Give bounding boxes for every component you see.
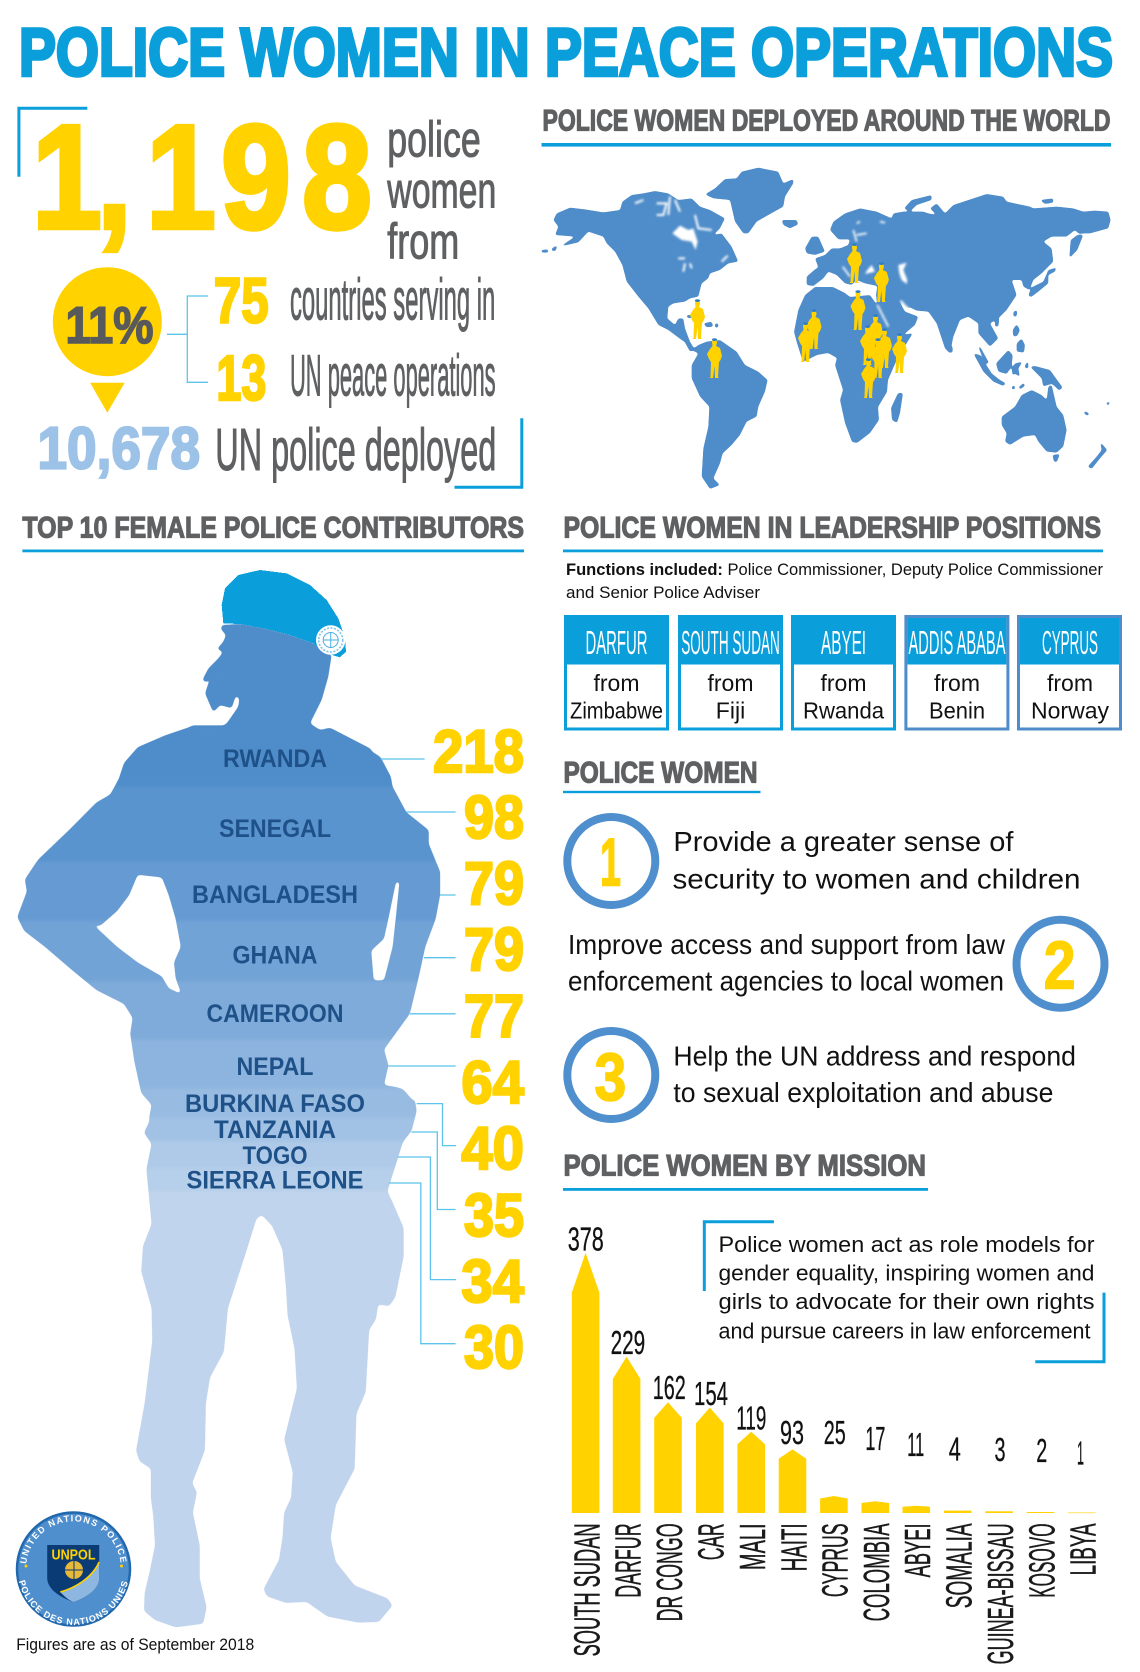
bar chart: 1 xyxy=(1077,1435,1084,1472)
item 3 xyxy=(567,1031,1076,1119)
panel: leadership positions xyxy=(563,512,1120,729)
mission labels xyxy=(566,1523,1104,1664)
badge: 11 percent: 11% xyxy=(66,297,154,355)
country labels: TOGO xyxy=(242,1142,308,1170)
card: Abyei: Rwanda xyxy=(803,697,884,723)
card: Cyprus: Norway xyxy=(1031,697,1109,723)
panel: police women benefits xyxy=(563,756,1104,1119)
bar chart: KOSOVO xyxy=(1021,1523,1062,1598)
country labels: CAMEROON xyxy=(206,1000,344,1028)
callout: role models: girls to advocate for their own rights xyxy=(718,1289,1094,1314)
contributor numbers: 79 xyxy=(464,916,524,983)
bar values: 17 xyxy=(865,1420,885,1457)
bar chart xyxy=(566,1220,1104,1664)
bar chart: GUINEA-BISSAU xyxy=(980,1523,1021,1664)
item 2: Improve access and support from law xyxy=(568,929,1006,960)
contributor numbers: 77 xyxy=(464,982,524,1050)
country labels: SIERRA LEONE xyxy=(186,1167,364,1195)
bar values: 25 xyxy=(824,1414,846,1451)
infographic canvas: UN peace operations xyxy=(290,344,496,409)
card: Cyprus: from xyxy=(1047,670,1093,696)
text: functions included: Functions included: Police Commissioner, Deputy Police Commissioner xyxy=(566,561,1103,579)
card: Addis Ababa: from xyxy=(934,670,980,696)
card: Darfur: from xyxy=(594,670,640,696)
mission labels: HAITI xyxy=(773,1523,814,1571)
panel: leadership positions: ADDIS ABABA xyxy=(908,624,1006,661)
bar chart: DARFUR xyxy=(607,1523,648,1598)
mission labels: LIBYA xyxy=(1063,1523,1104,1575)
card: South Sudan: Fiji xyxy=(716,697,745,723)
bar values: 162 xyxy=(653,1369,686,1406)
footnote: Figures are as of September 2018 xyxy=(16,1636,254,1654)
deployment figures on map xyxy=(690,243,907,398)
contributor numbers: 35 xyxy=(464,1182,524,1249)
mission labels: ABYEI xyxy=(897,1523,938,1577)
icon: UNPOL logo: POLICE DES NATIONS UNIES xyxy=(18,1580,128,1626)
text: police women from: police xyxy=(387,112,481,168)
item 3: 3 xyxy=(594,1039,626,1115)
card: South Sudan xyxy=(679,616,782,729)
bar chart: CYPRUS xyxy=(815,1523,856,1597)
item 2 xyxy=(568,920,1104,1008)
callout: role models: Police women act as role models for xyxy=(718,1232,1094,1257)
contributor numbers: 34 xyxy=(461,1248,525,1315)
world map shapes xyxy=(541,168,1111,489)
bar values: 3 xyxy=(994,1431,1006,1468)
text: police women from: women xyxy=(387,162,496,218)
callout: role models xyxy=(704,1222,1104,1362)
bar values: 4 xyxy=(949,1430,961,1467)
infographic canvas: countries serving in xyxy=(290,267,495,332)
icon: blue beret with UN emblem xyxy=(222,570,346,657)
contributor numbers xyxy=(433,718,525,1381)
big number 1,198: 1,198 xyxy=(32,95,372,260)
card: Addis Ababa: Benin xyxy=(929,697,985,723)
panel: headline statistics xyxy=(19,95,522,487)
contributor numbers: 98 xyxy=(464,784,524,851)
icon: UNPOL logo: UNPOL xyxy=(52,1548,96,1564)
panel: top 10 female police contributors xyxy=(0,512,540,1672)
mission labels: COLOMBIA xyxy=(856,1523,897,1621)
panel: leadership positions: SOUTH SUDAN xyxy=(681,624,780,661)
bar values: 378 xyxy=(568,1220,604,1257)
item 1: Provide a greater sense of xyxy=(673,826,1014,857)
mission labels: MALI xyxy=(732,1523,773,1570)
bar values: 229 xyxy=(611,1324,645,1361)
corner bracket top left xyxy=(19,108,87,177)
bar values: 2 xyxy=(1036,1432,1047,1469)
country labels xyxy=(185,745,365,1195)
bar values: 119 xyxy=(736,1399,766,1436)
card: Abyei: from xyxy=(820,670,866,696)
heading: by mission: POLICE WOMEN BY MISSION xyxy=(564,1150,926,1183)
icon: UNPOL logo xyxy=(16,1511,132,1627)
bar values xyxy=(568,1220,1084,1472)
contributor numbers: 64 xyxy=(461,1049,525,1116)
panel: police women by mission xyxy=(563,1150,1104,1664)
connector lines xyxy=(167,296,208,382)
bars xyxy=(572,1253,1096,1513)
card: Darfur: Zimbabwe xyxy=(570,697,663,723)
contributor numbers: 30 xyxy=(464,1314,524,1381)
contributor numbers: 218 xyxy=(433,718,524,785)
leader lines xyxy=(380,759,456,1344)
card: Darfur: DARFUR xyxy=(586,624,648,661)
bar chart: DR CONGO xyxy=(649,1523,690,1621)
heading: top 10 contributors: TOP 10 FEMALE POLICE CONTRIBUTORS xyxy=(22,512,524,544)
country labels: NEPAL xyxy=(236,1053,314,1081)
item 1 xyxy=(567,817,1080,905)
bar values: 11 xyxy=(907,1426,924,1463)
country labels: TANZANIA xyxy=(214,1116,336,1144)
item 1: security to women and children xyxy=(672,864,1080,895)
contributor numbers: 40 xyxy=(461,1115,524,1182)
item 1: 1 xyxy=(600,825,621,901)
text: functions included xyxy=(566,561,1103,602)
callout: role models: and pursue careers in law enforcement xyxy=(718,1318,1090,1343)
corner bracket bottom right xyxy=(454,418,522,487)
mission labels: SOUTH SUDAN xyxy=(566,1523,607,1656)
text: police women from xyxy=(387,112,496,269)
text: police women from: from xyxy=(387,213,459,269)
badge: 11 percent xyxy=(53,267,162,413)
country labels: RWANDA xyxy=(223,745,327,773)
icon: UNPOL logo: UNITED NATIONS POLICE xyxy=(20,1515,127,1564)
mission labels: SOMALIA xyxy=(938,1523,980,1608)
bar chart: CAR xyxy=(691,1523,732,1560)
card: Abyei xyxy=(792,616,895,729)
item 2: enforcement agencies to local women xyxy=(568,966,1004,997)
card: South Sudan: from xyxy=(708,670,754,696)
bar values: 93 xyxy=(780,1414,804,1451)
item 3: Help the UN address and respond xyxy=(673,1040,1076,1071)
number 75: 75 xyxy=(214,264,269,336)
card: Cyprus xyxy=(1018,616,1120,729)
contributor numbers: 79 xyxy=(464,850,524,917)
item 3: to sexual exploitation and abuse xyxy=(673,1077,1053,1108)
country labels: BANGLADESH xyxy=(192,881,358,909)
country labels: BURKINA FASO xyxy=(185,1090,365,1118)
callout: role models: gender equality, inspiring women and xyxy=(718,1260,1094,1286)
card: Darfur xyxy=(565,616,668,729)
panel: world map xyxy=(541,105,1111,489)
card: Abyei: ABYEI xyxy=(821,624,866,661)
text: functions included: and Senior Police Adviser xyxy=(566,584,761,602)
item 2: 2 xyxy=(1044,928,1076,1004)
soldier silhouette with graded bands xyxy=(18,624,440,1628)
card: Addis Ababa xyxy=(906,616,1008,729)
country labels: GHANA xyxy=(232,942,318,970)
heading: police women: POLICE WOMEN xyxy=(564,756,758,789)
bar values: 154 xyxy=(694,1375,728,1412)
text: UN police deployed: UN police deployed xyxy=(215,417,496,483)
number 10,678: 10,678 xyxy=(38,416,200,482)
country labels: SENEGAL xyxy=(219,815,331,843)
number 13: 13 xyxy=(216,342,266,414)
